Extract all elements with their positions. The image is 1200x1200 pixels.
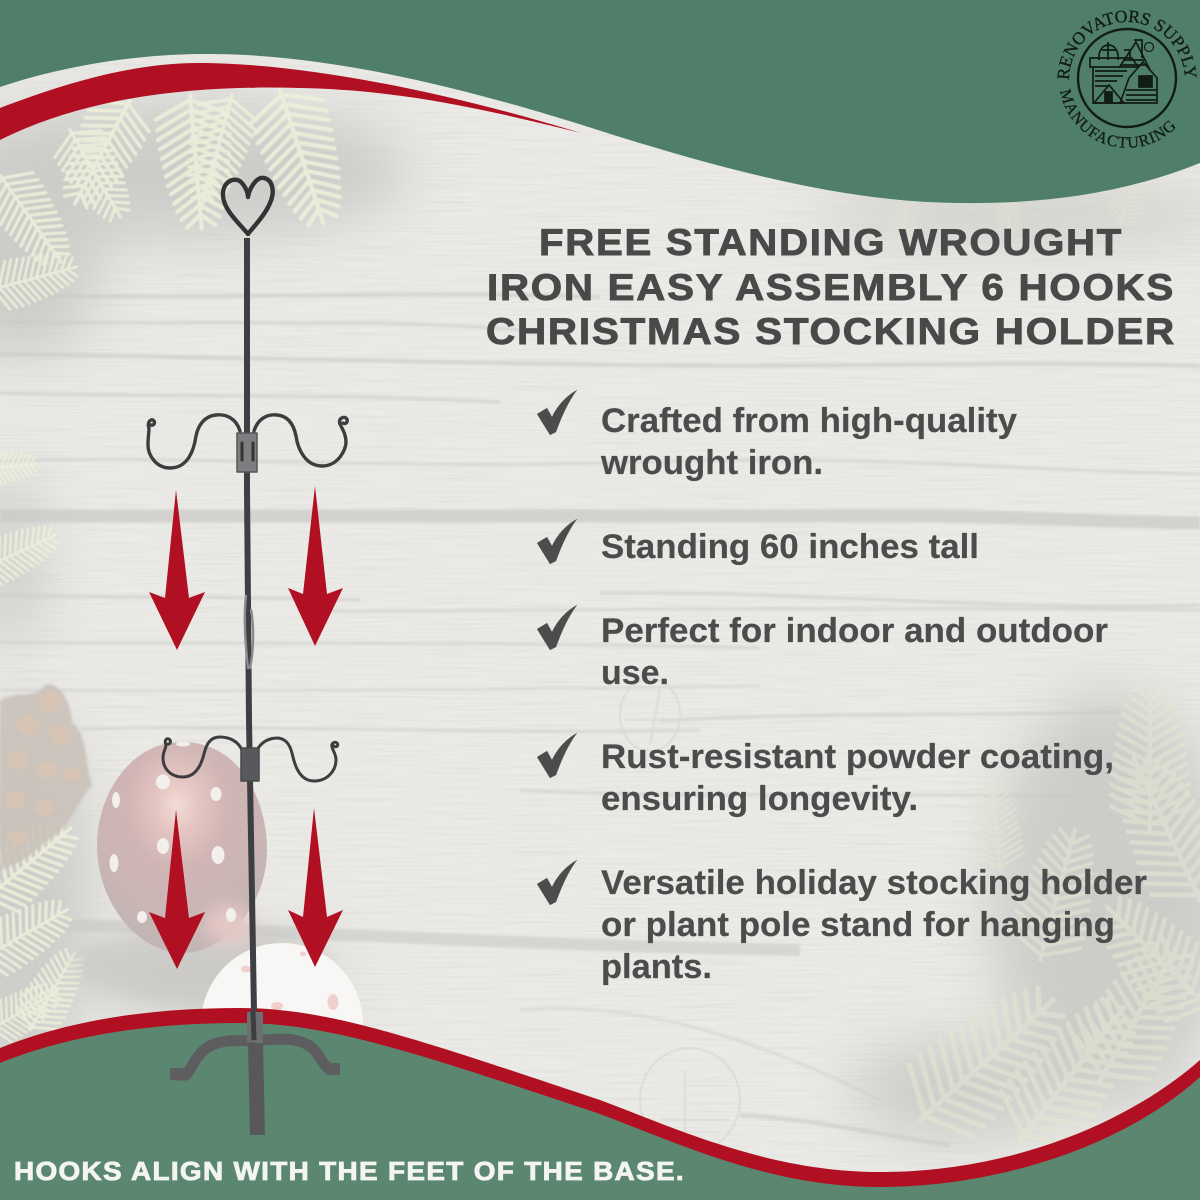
logo: Renovators Supply Manufacturing — [1057, 10, 1197, 148]
feature 4 text — [601, 738, 1114, 818]
red arrow: lower right — [288, 808, 343, 967]
pine branches: left side — [0, 78, 359, 1048]
feature 5 text: plants. — [601, 948, 712, 986]
check icon 5 — [537, 860, 577, 905]
title: IRON EASY ASSEMBLY 6 HOOKS — [487, 267, 1175, 308]
feature 5 text — [601, 864, 1147, 986]
wood knots — [620, 679, 740, 1152]
red arrow: upper left — [149, 490, 205, 650]
feature 5 text: or plant pole stand for hanging — [601, 906, 1115, 944]
check icon 1 — [537, 390, 577, 435]
top green wave — [0, 0, 1200, 203]
pine cone — [0, 684, 92, 870]
check icon 4 — [537, 733, 577, 778]
logo: Renovators Supply Manufacturing: MANUFACTURING — [1060, 88, 1176, 148]
feature 3 text — [601, 612, 1108, 692]
icon: house — [1090, 40, 1157, 103]
heart finial — [223, 178, 273, 234]
upper hooks — [148, 415, 347, 468]
pole center joint — [245, 596, 253, 668]
bottom green wave — [0, 1023, 1200, 1200]
red arrow: lower left — [149, 810, 205, 969]
upper bracket — [237, 433, 257, 472]
red arrow: upper right — [288, 486, 343, 646]
footer note: HOOKS ALIGN WITH THE FEET OF THE BASE. — [14, 1158, 685, 1186]
feature 5 text: Versatile holiday stocking holder — [601, 864, 1147, 902]
red ornament — [75, 742, 325, 1005]
check icon 2 — [537, 519, 577, 564]
top red swoosh — [0, 63, 581, 140]
lower bracket — [241, 748, 259, 781]
wrought iron stand — [148, 178, 347, 1012]
title: FREE STANDING WROUGHT — [539, 222, 1123, 263]
title: CHRISTMAS STOCKING HOLDER — [486, 311, 1176, 352]
stand base — [170, 1012, 340, 1135]
title — [486, 222, 1176, 352]
pole — [247, 238, 254, 1012]
feature 3 text: use. — [601, 654, 669, 692]
feature 4 text: Rust-resistant powder coating, — [601, 738, 1114, 776]
feature 1 text: Crafted from high-quality — [601, 402, 1017, 440]
feature 4 text: ensuring longevity. — [601, 780, 918, 818]
feature 2 text: Standing 60 inches tall — [601, 528, 979, 566]
white ornament — [201, 943, 363, 1105]
check icon 3 — [537, 605, 577, 650]
pine branches: right side — [885, 161, 1200, 1168]
logo: Renovators Supply Manufacturing: RENOVATORS SUPPLY — [1057, 10, 1197, 80]
feature 3 text: Perfect for indoor and outdoor — [601, 612, 1108, 650]
feature 1 text — [600, 402, 1017, 482]
feature 1 text: wrought iron. — [600, 444, 823, 482]
feature list — [537, 390, 1147, 986]
bottom red wave — [0, 1008, 1200, 1200]
lower hooks — [163, 737, 338, 781]
